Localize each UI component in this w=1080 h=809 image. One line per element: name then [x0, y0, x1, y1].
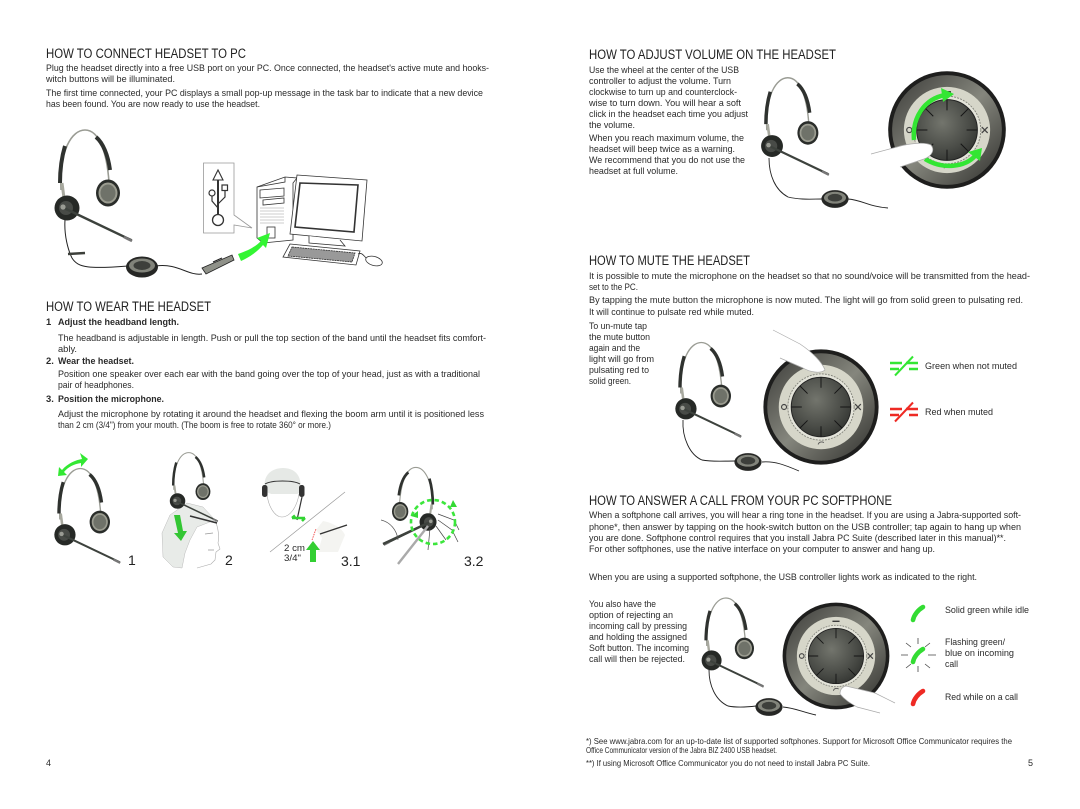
- illustration: step 3.2 rotate microphone: [381, 467, 484, 569]
- text block: mute instructions: To un-mute tap: [589, 320, 647, 331]
- legend: flashing green or blue: call: [945, 658, 958, 669]
- illustration: step 1 adjust headband: [54, 453, 136, 568]
- icon: controller dial with finger pressing mute: [763, 330, 879, 465]
- heading: wear headset: HOW TO WEAR THE HEADSET: [46, 299, 211, 314]
- legend: green when not muted: Green when not muted: [925, 360, 1017, 371]
- text block: mute instructions: It will continue to pulsate red while muted.: [589, 306, 754, 317]
- text block: rejecting a call: call will then be rejected.: [589, 653, 685, 664]
- heading: mute headset: HOW TO MUTE THE HEADSET: [589, 253, 750, 268]
- illustration: step 2 put headset on head: [162, 453, 233, 568]
- text block: mute instructions: again and the: [589, 342, 640, 353]
- text block: mute instructions: light will go from: [589, 353, 654, 364]
- text block: mute instructions: pulsating red to: [589, 364, 649, 375]
- text block: wearing steps: Adjust the microphone by rotating it around the headset and flexing the boom arm until it is positioned less: [58, 408, 484, 419]
- text block: wearing steps: The headband is adjustable in length. Push or pull the top section of the band until the headset fits comfort-: [58, 332, 486, 343]
- text block: rejecting a call: option of rejecting an: [589, 609, 673, 620]
- text block: softphone instructions: For other softphones, use the native interface on your computer to answer and hang up.: [589, 543, 935, 554]
- text block: rejecting a call: incoming call by pressing: [589, 620, 687, 631]
- illustration: step 3.1 microphone distance: 3/4": [284, 552, 301, 563]
- text block: volume instructions: headset at full volume.: [589, 165, 678, 176]
- icon: controller dial with finger on hook button: [783, 603, 895, 713]
- text block: volume instructions: click in the headset each time you adjust: [589, 108, 748, 119]
- icon: USB symbol callout: [204, 163, 252, 233]
- text block: wearing steps: Wear the headset.: [58, 355, 134, 366]
- icon: computer with monitor, keyboard and mouse: [257, 175, 383, 268]
- text block: volume instructions: headset will beep twice as a warning.: [589, 143, 735, 154]
- page number 5: 5: [1028, 757, 1033, 768]
- icon: headset with controller: [761, 78, 888, 208]
- arrow: green arrow to USB port: [238, 233, 270, 261]
- illustration: step 3.1 microphone distance: 3.1: [341, 553, 361, 569]
- legend: red when muted: [890, 402, 993, 422]
- legend: flashing green or blue: blue on incoming: [945, 647, 1014, 658]
- text block: volume instructions: [588, 64, 748, 176]
- text block: volume instructions: clockwise to turn up and counterclock-: [589, 86, 737, 97]
- legend: flashing green or blue: [901, 636, 1014, 672]
- text block: softphone instructions: [589, 509, 1021, 582]
- legend: green when not muted: [890, 356, 1017, 376]
- text block: mute instructions: solid green.: [589, 375, 631, 386]
- text block: wearing steps: pair of headphones.: [58, 379, 134, 390]
- text block: connect instructions: Plug the headset directly into a free USB port on your PC. Once connected, the headset's active mute and hooks-: [46, 62, 489, 73]
- icon: controller dial with finger and green arrows: [871, 71, 1006, 189]
- page number 4: 4: [46, 757, 51, 768]
- text block: mute instructions: the mute button: [589, 331, 650, 342]
- footnotes: [586, 736, 1012, 768]
- heading: answer call: HOW TO ANSWER A CALL FROM YOUR PC SOFTPHONE: [589, 493, 892, 508]
- text block: mute instructions: By tapping the mute button the microphone is now muted. The light will go from solid green to pulsating red.: [589, 294, 1023, 305]
- icon: headset with controller: [702, 598, 816, 716]
- legend: red while on a call: [913, 691, 1018, 704]
- illustration: step 3.1 microphone distance: 2 cm: [284, 542, 305, 553]
- illustration: step 2 put headset on head: 2: [225, 552, 233, 568]
- icon: headset with controller: [675, 342, 799, 471]
- text block: volume instructions: When you reach maximum volume, the: [589, 132, 744, 143]
- text block: volume instructions: wise to turn down. You will hear a soft: [588, 97, 741, 108]
- text block: wearing steps: ably.: [58, 343, 77, 354]
- text block: wearing steps: Position the microphone.: [58, 393, 164, 404]
- legend: red while on a call: Red while on a call: [945, 691, 1018, 702]
- panel: answer a call: [589, 493, 1029, 716]
- text block: wearing steps: 3.: [46, 393, 54, 404]
- text block: softphone instructions: When a softphone call arrives, you will hear a ring tone in the headset. If you are using a Jabra-supported soft-: [589, 509, 1021, 520]
- text block: volume instructions: controller to adjust the volume. Turn: [589, 75, 731, 86]
- legend: red when muted: Red when muted: [925, 406, 993, 417]
- text block: softphone instructions: you are done. Softphone control requires that you install Jabra PC Suite (described later in this manual)**.: [589, 532, 1006, 543]
- text block: wearing steps: 2.: [46, 355, 54, 366]
- legend: flashing green or blue: Flashing green/: [945, 636, 1005, 647]
- illustration: step 3.1 microphone distance: [262, 468, 361, 569]
- text block: connect instructions: has been found. You are now ready to use the headset.: [46, 98, 260, 109]
- text block: softphone instructions: phone*, then answer by tapping on the hook-switch button on the USB controller; tap again to hang up when: [589, 521, 1021, 532]
- text block: mute instructions: It is possible to mute the microphone on the headset so that no sound/voice will be transmitted from the head-: [589, 270, 1030, 281]
- text block: mute instructions: set to the PC.: [589, 281, 638, 292]
- panel: wear the headset: [46, 299, 486, 569]
- panel: adjust volume: [588, 47, 1006, 208]
- legend: solid green while idle: [913, 604, 1029, 620]
- text block: rejecting a call: You also have the: [589, 598, 656, 609]
- text block: wearing steps: Adjust the headband length.: [58, 316, 179, 327]
- text block: softphone instructions: When you are using a supported softphone, the USB controller lights work as indicated to the right.: [589, 571, 977, 582]
- illustration: step 3.2 rotate microphone: 3.2: [464, 553, 484, 569]
- text block: rejecting a call: and holding the assigned: [589, 631, 687, 642]
- footnotes: *) See www.jabra.com for an up-to-date list of supported softphones. Support for Microsoft Office Communicator requires the: [586, 736, 1012, 746]
- text block: connect instructions: The first time connected, your PC displays a small pop-up message in the task bar to indicate that a new device: [46, 87, 483, 98]
- text block: volume instructions: We recommend that you do not use the: [589, 154, 745, 165]
- text block: rejecting a call: Soft button. The incoming: [589, 642, 689, 653]
- text block: connect instructions: witch buttons will be illuminated.: [45, 73, 175, 84]
- text block: volume instructions: Use the wheel at the center of the USB: [589, 64, 739, 75]
- panel: connect headset to PC: [45, 46, 489, 278]
- footnotes: Office Communicator version of the Jabra BIZ 2400 USB headset.: [586, 745, 777, 755]
- legend: solid green while idle: Solid green while idle: [945, 604, 1029, 615]
- panel: mute headset: [589, 253, 1030, 471]
- text block: mute instructions: [589, 270, 1030, 386]
- text block: wearing steps: Position one speaker over each ear with the band going over the top of your head, just as with a traditional: [58, 368, 480, 379]
- text block: wearing steps: [46, 316, 486, 430]
- text block: wearing steps: than 2 cm (3/4") from your mouth. (The boom is free to rotate 360° or more.): [58, 419, 331, 430]
- text block: connect instructions: [45, 62, 489, 109]
- illustration: step 1 adjust headband: 1: [128, 552, 136, 568]
- heading: adjust volume: HOW TO ADJUST VOLUME ON THE HEADSET: [589, 47, 836, 62]
- icon: headset with cord and USB plug: [54, 130, 234, 278]
- text block: volume instructions: the volume.: [589, 119, 635, 130]
- text block: rejecting a call: [589, 598, 689, 664]
- heading: connect headset: HOW TO CONNECT HEADSET TO PC: [46, 46, 246, 61]
- footnotes: **) If using Microsoft Office Communicator you do not need to install Jabra PC Suite.: [586, 758, 870, 768]
- text block: wearing steps: 1: [46, 316, 51, 327]
